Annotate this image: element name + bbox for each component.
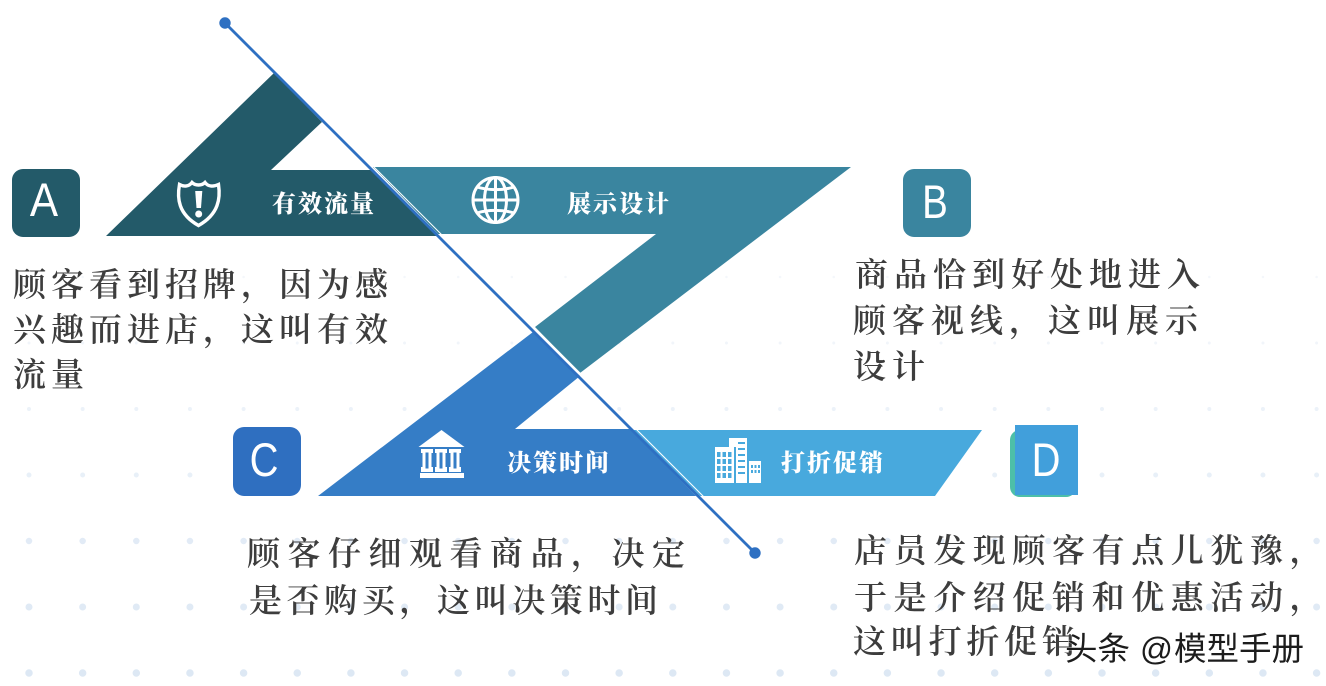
icon: bank — [418, 430, 464, 478]
label: 展示设计: 展示设计 — [567, 191, 671, 218]
icon: buildings — [715, 438, 761, 483]
badge A: A — [30, 175, 58, 227]
white edge line — [374, 167, 704, 497]
text block A: 流量 — [13, 357, 89, 394]
text block C: 是否购买，这叫决策时间 — [249, 583, 663, 620]
badge C: C — [250, 435, 278, 487]
badge D — [1010, 425, 1078, 497]
watermark: 模型手册 — [1174, 631, 1304, 667]
badge A — [12, 169, 80, 237]
text block D: 这叫打折促销 — [853, 624, 1080, 661]
badge D: D — [1032, 435, 1060, 487]
background dot grid — [29, 277, 1326, 673]
badge C — [233, 427, 301, 496]
text block B: 顾客视线，这叫展示 — [853, 303, 1204, 340]
text block B: 设计 — [853, 349, 931, 386]
text block A: 顾客看到招牌，因为感 — [13, 267, 393, 304]
label: 决策时间: 决策时间 — [507, 449, 611, 477]
watermark: @ — [1140, 631, 1173, 667]
panel: D ribbon — [632, 430, 982, 496]
icon: shield — [179, 182, 219, 226]
text block C: 顾客仔细观看商品，决定 — [247, 536, 692, 573]
text block D: 店员发现顾客有点儿犹豫， — [854, 533, 1326, 570]
panel: C ribbon — [318, 332, 696, 496]
text block B: 商品恰到好处地进入 — [855, 257, 1206, 294]
panel: B ribbon — [373, 167, 851, 373]
panel: A ribbon — [106, 73, 438, 236]
label: 打折促销: 打折促销 — [781, 449, 885, 477]
text block A: 兴趣而进店，这叫有效 — [13, 312, 393, 349]
text block D: 于是介绍促销和优惠活动， — [854, 580, 1326, 617]
label: 有效流量: 有效流量 — [272, 191, 376, 218]
icon: globe — [473, 178, 518, 222]
badge B — [903, 169, 971, 237]
diagonal line with end dots — [219, 17, 761, 559]
watermark: 头条 — [1065, 631, 1130, 667]
badge B: B — [922, 176, 948, 229]
